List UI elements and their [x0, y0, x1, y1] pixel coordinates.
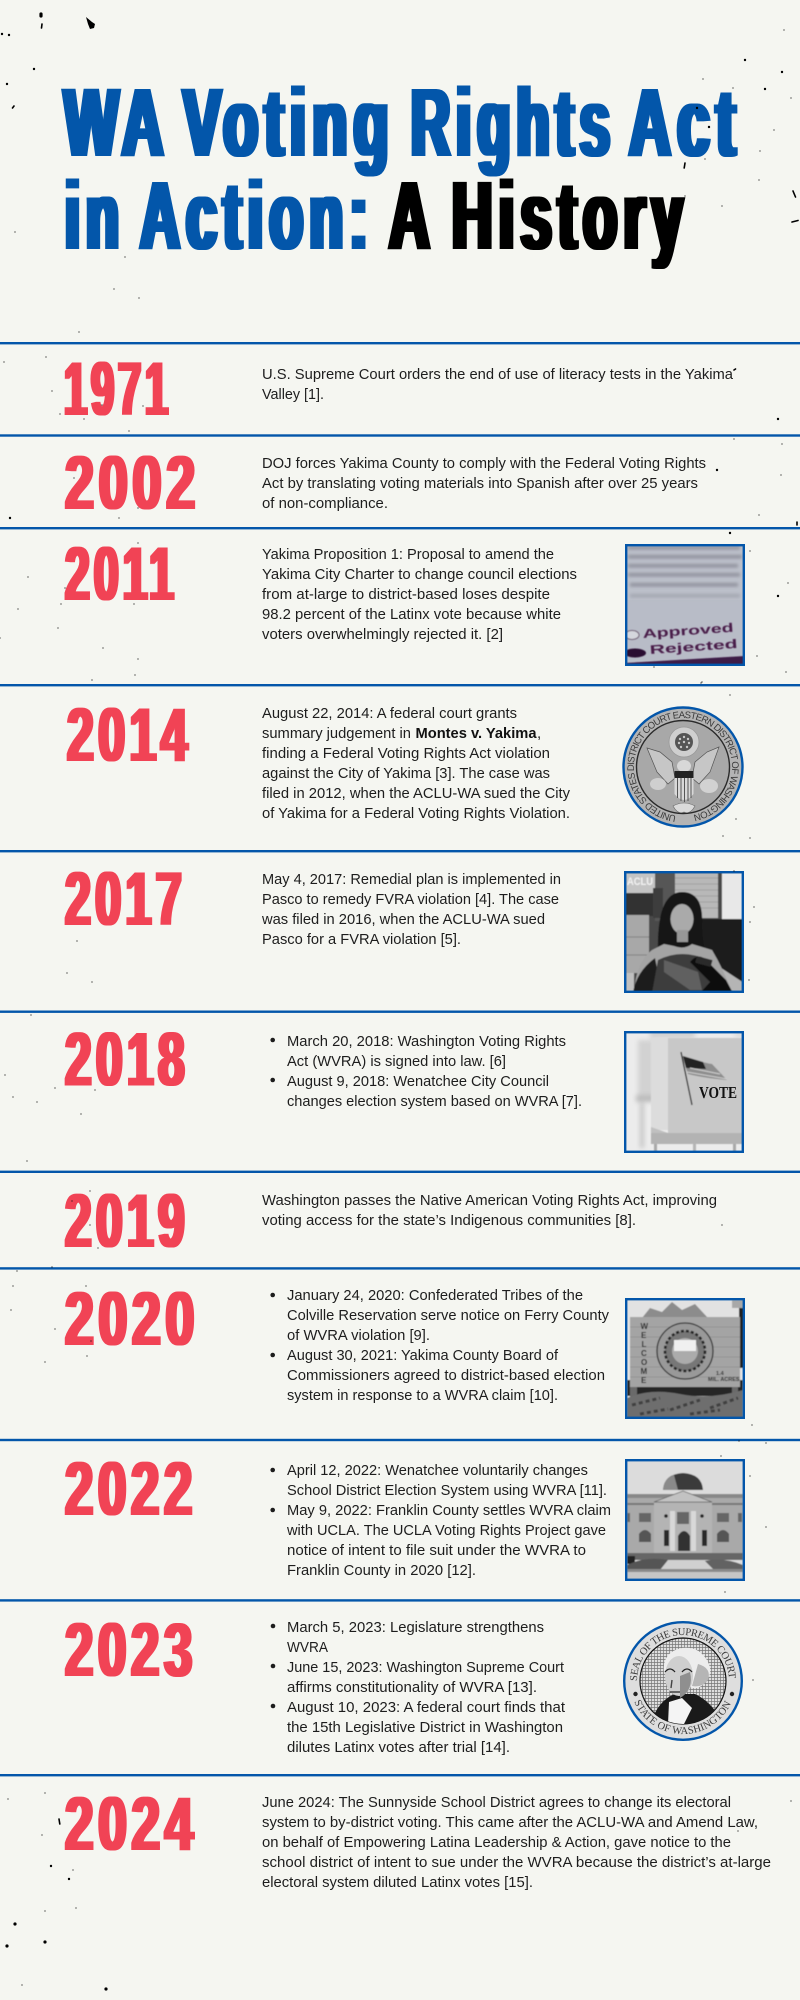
text block 2014: filed in 2012, when the ACLU-WA sued the City [262, 785, 570, 802]
text block 2014: against the City of Yakima [3]. The case was [262, 765, 550, 782]
seal: Supreme Court of the State of Washington: STATE OF WASHINGTON [634, 1700, 731, 1734]
year 2002: 2002 [65, 441, 200, 526]
row: 2011 [65, 532, 745, 666]
text block 2014: , [537, 725, 541, 742]
text block 2022 [270, 1462, 611, 1579]
photo: Franklin County courthouse [625, 1459, 745, 1581]
title: Action: [140, 161, 374, 270]
photo: Colville Reservation welcome sign: E [641, 1331, 647, 1340]
photo: Colville Reservation welcome sign [625, 1298, 745, 1419]
row: 2014 [66, 693, 744, 828]
year 2022: 2022 [65, 1447, 197, 1532]
year 2023: 2023 [65, 1608, 197, 1693]
photo: voting booth [624, 1031, 744, 1153]
seal: Supreme Court of the State of Washington [623, 1621, 743, 1741]
text block 2011: from at-large to district-based loses despite [262, 586, 550, 603]
text block 2024: on behalf of Empowering Latina Leadership & Action, gave notice to the [262, 1834, 731, 1851]
text block 2022: April 12, 2022: Wenatchee voluntarily changes [287, 1462, 588, 1479]
year 2024: 2024 [65, 1782, 198, 1867]
row: 2017 [64, 871, 744, 993]
photo: ballot approved / rejected [624, 544, 745, 666]
text block 2022: School District Election System using WVRA [11]. [287, 1482, 607, 1499]
text block 2017 [261, 871, 561, 948]
text block 2022: notice of intent to file suit under the WVRA to [287, 1542, 586, 1559]
photo: woman at ACLU office [624, 871, 744, 993]
text block 2023 [271, 1619, 566, 1756]
text block 2023: June 15, 2023: Washington Supreme Court [287, 1659, 565, 1676]
title: Voting [183, 68, 395, 177]
text block 2022: Franklin County in 2020 [12]. [287, 1562, 476, 1579]
year 2019: 2019 [65, 1179, 189, 1264]
text block 2019: Washington passes the Native American Voting Rights Act, improving [262, 1192, 717, 1209]
photo: woman at ACLU office: ACLU [627, 876, 653, 888]
text block 2002: of non-compliance. [262, 495, 388, 512]
text block 2019 [262, 1192, 717, 1229]
row: 2023 [64, 1608, 743, 1756]
text block 2011: voters overwhelmingly rejected it. [2] [262, 626, 503, 643]
photo: voting booth: VOTE [699, 1083, 737, 1102]
text block 2018 [270, 1033, 582, 1110]
row: 1971 [64, 347, 734, 432]
year 2017: 2017 [65, 857, 186, 942]
text block 2020: system in response to a WVRA claim [10]. [287, 1387, 558, 1404]
year 2011: 2011 [65, 532, 178, 617]
text block 2011: Yakima City Charter to change council elections [262, 566, 577, 583]
year 2018: 2018 [65, 1018, 189, 1102]
photo: Colville Reservation welcome sign: O [641, 1358, 647, 1367]
photo: Colville Reservation welcome sign: 1.4 [716, 1371, 725, 1377]
text block 2024: system to by-district voting. This came after the ACLU-WA and Amend Law, [262, 1814, 758, 1831]
text block 2024: electoral system diluted Latinx votes [15]. [262, 1874, 533, 1891]
text block 2020: Commissioners agreed to district-based election [287, 1367, 605, 1384]
text block 2023: dilutes Latinx votes after trial [14]. [287, 1739, 510, 1756]
text block 2020: January 24, 2020: Confederated Tribes of the [287, 1287, 583, 1304]
photo: ballot approved / rejected: Approved [642, 621, 734, 641]
text block 2014: of Yakima for a Federal Voting Rights Violation. [262, 805, 570, 822]
photo: Colville Reservation welcome sign: C [641, 1349, 647, 1358]
photo: Colville Reservation welcome sign: MIL. ACRES [708, 1377, 740, 1383]
photo: Colville Reservation welcome sign: W [640, 1322, 648, 1331]
text block 2018: August 9, 2018: Wenatchee City Council [287, 1073, 549, 1090]
text block 2014: summary judgement in [262, 725, 411, 742]
text block 2023: WVRA [287, 1639, 328, 1656]
text block 2014: August 22, 2014: A federal court grants [262, 705, 517, 722]
photo: Colville Reservation welcome sign: E [641, 1376, 647, 1385]
title [64, 68, 742, 270]
text block 2002 [262, 455, 706, 512]
text block 2011 [262, 546, 577, 643]
text block 1971 [262, 366, 734, 403]
title: Rights [411, 68, 616, 177]
photo: ballot approved / rejected: Rejected [649, 637, 738, 657]
seal: Supreme Court of the State of Washington: SEAL OF THE SUPREME COURT [630, 1628, 736, 1680]
text block 2023: affirms constitutionality of WVRA [13]. [287, 1679, 537, 1696]
text block 2014 [262, 705, 570, 822]
text block 2011: Yakima Proposition 1: Proposal to amend the [262, 546, 554, 563]
text block 2024 [262, 1794, 771, 1891]
title: WA [64, 68, 170, 177]
text block 2002: Act by translating voting materials into Spanish after over 25 years [262, 475, 698, 492]
text block 2017: Pasco for a FVRA violation [5]. [262, 931, 461, 948]
text block 2017: Pasco to remedy FVRA violation [4]. The case [262, 891, 559, 908]
text block 2024: June 2024: The Sunnyside School District agrees to change its electoral [262, 1794, 731, 1811]
text block 2020: Colville Reservation serve notice on Ferry County [287, 1307, 609, 1324]
text block 2020: August 30, 2021: Yakima County Board of [287, 1347, 559, 1364]
photo: Colville Reservation welcome sign: M [640, 1367, 648, 1376]
row: 2022 [65, 1447, 745, 1581]
text block 2018: Act (WVRA) is signed into law. [6] [287, 1053, 506, 1070]
title: in [65, 161, 125, 270]
text block 2014: Montes v. Yakima [416, 725, 537, 742]
row: 2019 [65, 1179, 717, 1264]
row: 2018 [65, 1018, 744, 1153]
text block 2022: with UCLA. The UCLA Voting Rights Project gave [286, 1522, 606, 1539]
row: 2024 [65, 1782, 771, 1891]
photo: Colville Reservation welcome sign: L [642, 1340, 646, 1349]
text block 2023: August 10, 2023: A federal court finds that [287, 1699, 566, 1716]
text block 1971: Valley [1]. [262, 386, 324, 403]
seal: U.S. District Court Eastern District of Washington: UNITED STATES DISTRICT COURT EASTERN DISTRICT OF WASHINGTON [627, 711, 739, 822]
year 2014: 2014 [67, 693, 192, 778]
text block 2023: the 15th Legislative District in Washington [287, 1719, 563, 1736]
text block 2018: March 20, 2018: Washington Voting Rights [287, 1033, 566, 1050]
text block 2022: May 9, 2022: Franklin County settles WVRA claim [287, 1502, 611, 1519]
text block 2014: finding a Federal Voting Rights Act violation [262, 745, 550, 762]
text block 2024: school district of intent to sue under the WVRA because the district’s at-large [262, 1854, 771, 1871]
text block 2018: changes election system based on WVRA [7]. [287, 1093, 582, 1110]
text block 2020: of WVRA violation [9]. [287, 1327, 430, 1344]
year 2020: 2020 [65, 1277, 199, 1362]
row: 2002 [65, 441, 706, 526]
text block 2023: March 5, 2023: Legislature strengthens [287, 1619, 544, 1636]
year 1971: 1971 [64, 347, 172, 432]
text block 2019: voting access for the state’s Indigenous communities [8]. [262, 1212, 636, 1229]
text block 2020 [270, 1287, 609, 1404]
text block 1971: U.S. Supreme Court orders the end of use of literacy tests in the Yakima [262, 366, 734, 383]
text block 2002: DOJ forces Yakima County to comply with the Federal Voting Rights [262, 455, 706, 472]
title: A [389, 161, 436, 270]
text block 2017: May 4, 2017: Remedial plan is implemented in [262, 871, 561, 888]
text block 2017: was filed in 2016, when the ACLU-WA sued [261, 911, 545, 928]
row: 2020 [65, 1277, 745, 1419]
text block 2011: 98.2 percent of the Latinx vote because white [262, 606, 561, 623]
